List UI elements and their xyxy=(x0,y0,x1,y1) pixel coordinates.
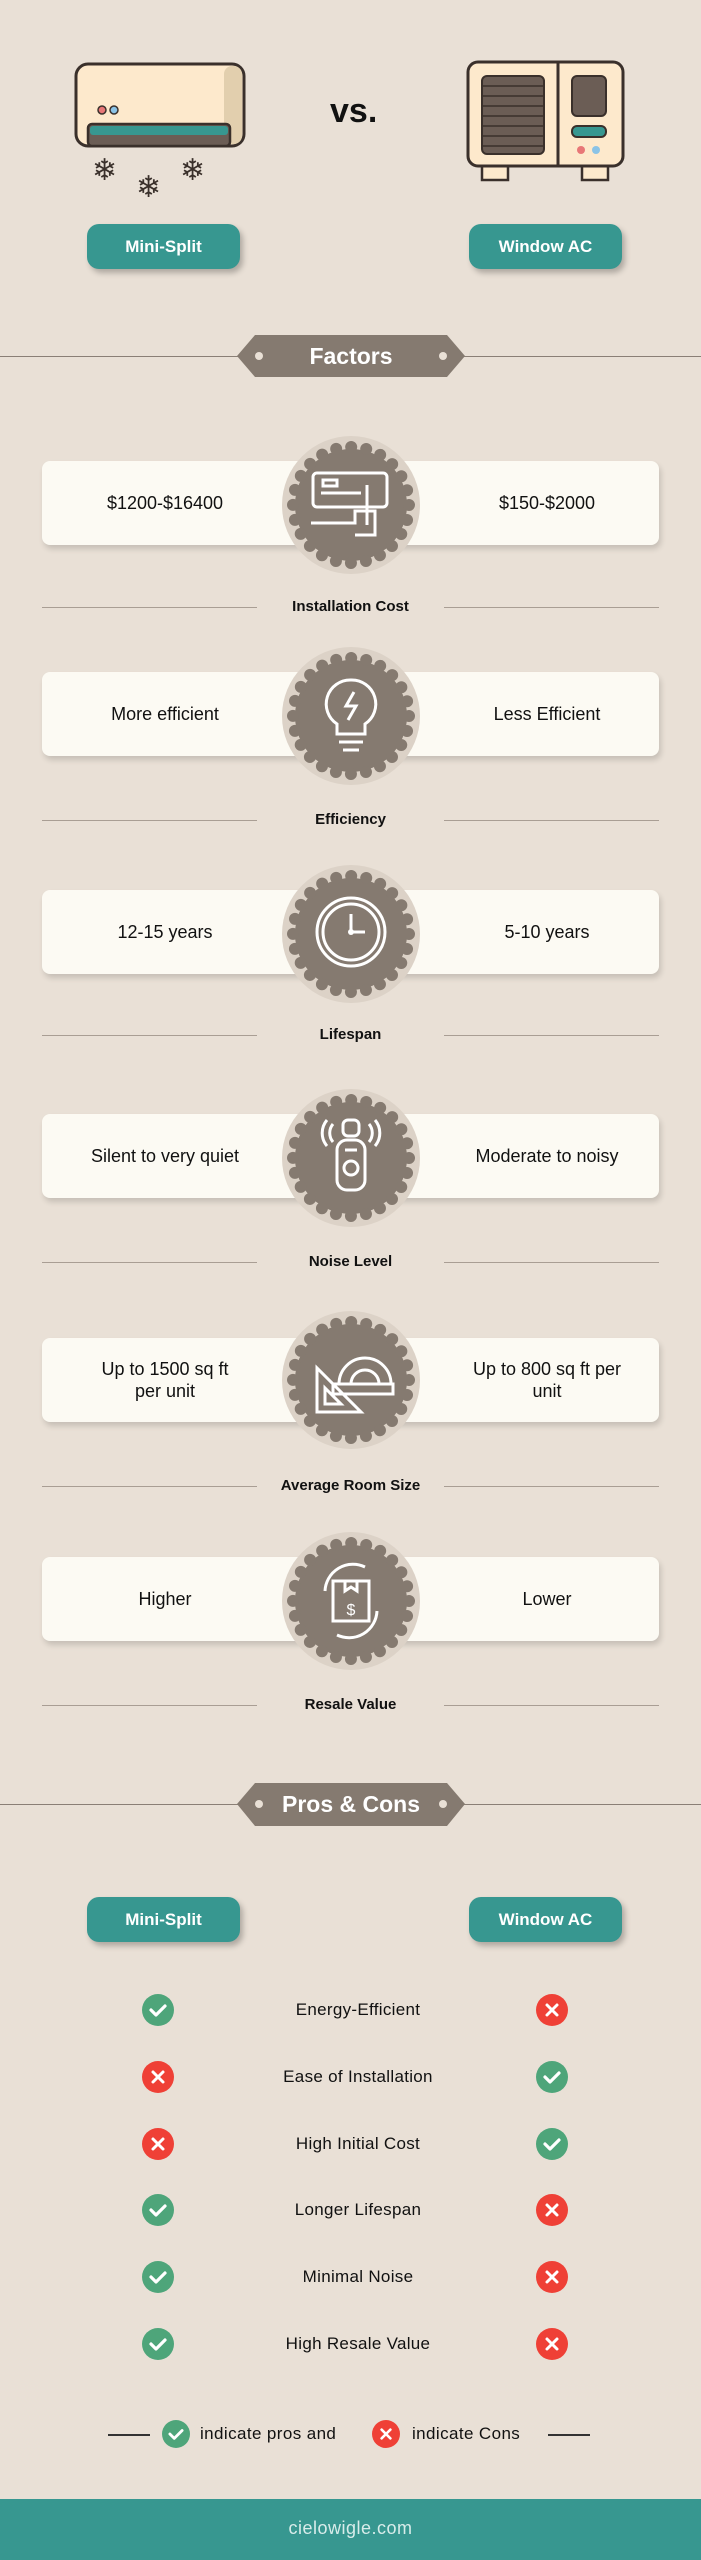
row: lifespan xyxy=(142,2194,568,2226)
panel: resale value xyxy=(42,1532,663,1713)
button: Mini-Split pros: Mini-Split xyxy=(125,1910,202,1928)
panel: lifespan: 12-15 years xyxy=(117,922,213,942)
panel: lifespan: Lifespan xyxy=(320,1026,381,1043)
row: ease: Ease of Installation xyxy=(283,2067,433,2086)
row: noise xyxy=(142,2261,568,2293)
heading: Factors: Factors xyxy=(309,343,393,369)
panel: resale value: Higher xyxy=(138,1589,192,1609)
row: lifespan: Longer Lifespan xyxy=(295,2200,421,2219)
panel: efficiency: Less Efficient xyxy=(494,704,600,724)
row: noise: Minimal Noise xyxy=(303,2267,413,2286)
icon: box with dollar xyxy=(282,1532,420,1670)
panel: installation cost: $1200-$16400 xyxy=(107,493,223,513)
panel: average room size: Up to 800 sq ft per unit xyxy=(473,1359,621,1401)
button: Mini-Split pros xyxy=(87,1897,240,1942)
row: cost: High Initial Cost xyxy=(296,2134,420,2153)
panel: average room size: Average Room Size xyxy=(281,1477,420,1494)
panel: lifespan: 5-10 years xyxy=(504,922,590,942)
panel: noise level: Moderate to noisy xyxy=(475,1146,619,1166)
heading: Pros & Cons: Pros & Cons xyxy=(282,1791,420,1817)
panel: noise level: Noise Level xyxy=(309,1253,392,1270)
icon: bulb xyxy=(282,647,420,785)
panel: noise level xyxy=(42,1089,663,1270)
icon: clock xyxy=(282,865,420,1003)
button: Window AC pros: Window AC xyxy=(499,1910,592,1928)
panel: installation cost: $150-$2000 xyxy=(499,493,595,513)
button: Window AC pros xyxy=(469,1897,622,1942)
panel: efficiency: Efficiency xyxy=(315,811,386,828)
button: Window AC xyxy=(469,224,622,269)
panel: average room size xyxy=(42,1311,663,1494)
panel: noise level: Silent to very quiet xyxy=(91,1146,239,1166)
icon: window AC xyxy=(466,60,624,182)
pros cons table xyxy=(142,1994,568,2360)
footer: cielowigle.com xyxy=(288,2518,413,2538)
panel: resale value: Resale Value xyxy=(305,1696,396,1713)
panel: efficiency: More efficient xyxy=(111,704,219,724)
button: Mini-Split xyxy=(87,224,240,269)
legend: indicate Cons xyxy=(412,2424,520,2443)
heading: Pros & Cons xyxy=(0,1783,701,1826)
button: Mini-Split: Mini-Split xyxy=(125,236,202,256)
icon: protractor xyxy=(282,1311,420,1449)
icon: wrench AC xyxy=(282,436,420,574)
panel: lifespan xyxy=(42,865,663,1043)
row: energy xyxy=(142,1994,568,2026)
heading: Factors xyxy=(0,335,701,377)
row: cost xyxy=(142,2128,568,2160)
panel: average room size: per unit xyxy=(135,1381,195,1401)
icon: sound meter xyxy=(282,1089,420,1227)
legend: indicate pros and xyxy=(200,2424,336,2443)
panel: resale value: Lower xyxy=(522,1589,572,1609)
vs text: vs. xyxy=(330,92,377,130)
row: ease xyxy=(142,2061,568,2093)
row: resale: High Resale Value xyxy=(286,2334,430,2353)
footer xyxy=(0,2499,701,2560)
panel: efficiency xyxy=(42,647,663,828)
panel: installation cost: Installation Cost xyxy=(292,598,409,615)
row: energy: Energy-Efficient xyxy=(296,2000,420,2019)
panel: average room size: Up to 1500 sq ft xyxy=(101,1359,229,1379)
button: Window AC: Window AC xyxy=(499,236,592,256)
icon: mini-split xyxy=(74,62,246,198)
icon: mini-split: ❄ xyxy=(92,154,117,187)
icon: mini-split: ❄ xyxy=(180,154,205,187)
row: resale xyxy=(142,2328,568,2360)
icon: box with dollar: $ xyxy=(347,1602,356,1619)
legend xyxy=(108,2420,590,2448)
panel: installation cost xyxy=(42,436,663,615)
